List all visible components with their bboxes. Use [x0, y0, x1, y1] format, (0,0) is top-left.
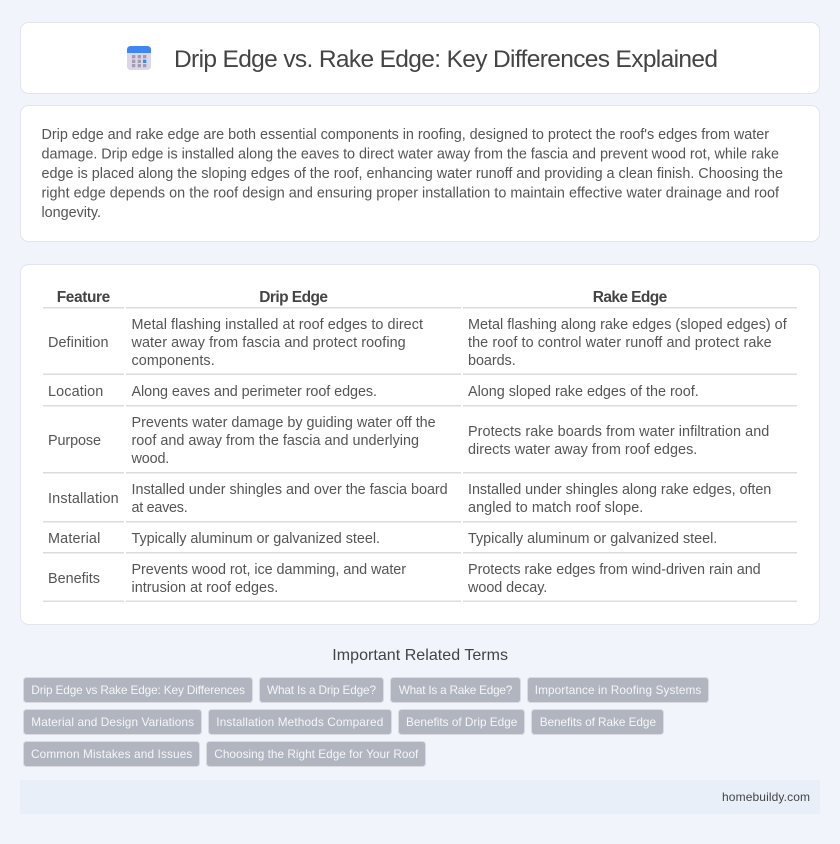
text block: introduction: Drip edge and rake edge are both essential components in roofing, designed to protect the roof's edges from water: [42, 127, 769, 143]
tag: [532, 710, 664, 734]
tag: [206, 742, 426, 766]
table header row: Drip Edge: [259, 289, 328, 306]
table row: location: [43, 384, 797, 406]
heading: important related terms: Important Related Terms: [332, 647, 508, 664]
table row: benefits: [43, 562, 797, 602]
panel: introduction: [20, 106, 820, 242]
footer: homebuildy.com: [722, 790, 810, 804]
table row: definition: Metal flashing along rake edges (sloped edges) of: [468, 317, 788, 333]
tag: [24, 710, 202, 734]
tag: [260, 678, 384, 702]
table row: location: Along eaves and perimeter roof edges.: [132, 384, 377, 400]
table row: benefits: intrusion at roof edges.: [132, 580, 278, 596]
table row: definition: water away from fascia and protect roofing: [130, 335, 406, 351]
tag: What Is a Drip Edge?: [267, 683, 376, 697]
text block: introduction: edge is placed along the sloping edges of the roof, enhancing water runoff and providing a clean finish. Choosing the: [42, 166, 783, 182]
table row: purpose: [43, 415, 797, 474]
table row: purpose: wood.: [130, 451, 169, 467]
table row: purpose: roof and away from the fascia and underlying: [132, 433, 419, 449]
tag: [24, 742, 200, 766]
table row: definition: [43, 317, 797, 375]
table row: installation: Installation: [48, 491, 119, 507]
table row: definition: the roof to control water runoff and protect rake: [468, 335, 772, 351]
table row: location: Location: [48, 384, 103, 400]
tag: Drip Edge vs Rake Edge: Key Differences: [31, 683, 245, 697]
tag: Installation Methods Compared: [216, 715, 383, 729]
table row: purpose: directs water away from roof edges.: [468, 442, 697, 458]
panel: comparison table: [20, 264, 820, 624]
text block: introduction: damage. Drip edge is installed along the eaves to direct water away from the fascia and prevent wood rot, while rake: [42, 146, 779, 162]
table header row: Rake Edge: [593, 289, 668, 306]
table row: installation: Installed under shingles and over the fascia board: [132, 482, 448, 498]
table row: purpose: Prevents water damage by guiding water off the: [132, 415, 436, 431]
tag: Material and Design Variations: [31, 715, 194, 729]
tag: Common Mistakes and Issues: [31, 747, 192, 761]
table row: benefits: Prevents wood rot, ice damming, and water: [132, 562, 406, 578]
tag: [208, 710, 392, 734]
table row: definition: Definition: [48, 335, 108, 351]
tag: [398, 710, 524, 734]
table row: definition: boards.: [468, 353, 516, 369]
table row: material: [43, 531, 797, 554]
footer: [20, 780, 820, 814]
icon: calendar: [127, 46, 151, 70]
panel: header: [20, 22, 820, 94]
related terms tags: [24, 678, 708, 766]
table row: installation: [43, 482, 797, 522]
tag: Benefits of Rake Edge: [540, 715, 656, 729]
table row: material: Typically aluminum or galvanized steel.: [468, 531, 717, 547]
table row: installation: angled to match roof slope.: [468, 500, 643, 516]
table header row: Feature: [57, 289, 111, 306]
tag: What Is a Rake Edge?: [399, 683, 513, 697]
table row: installation: at eaves.: [132, 500, 188, 516]
table row: purpose: Purpose: [48, 433, 101, 449]
table row: purpose: Protects rake boards from water infiltration and: [468, 424, 769, 440]
table row: location: Along sloped rake edges of the roof.: [468, 384, 699, 400]
tag: Benefits of Drip Edge: [406, 715, 518, 729]
text block: introduction: [42, 127, 783, 221]
table row: definition: components.: [132, 353, 215, 369]
table row: benefits: wood decay.: [467, 580, 547, 596]
title: Drip Edge vs. Rake Edge: Key Differences Explained: [174, 46, 718, 73]
table row: definition: Metal flashing installed at roof edges to direct: [132, 317, 423, 333]
text block: introduction: longevity.: [42, 205, 101, 221]
table row: benefits: Protects rake edges from wind-driven rain and: [468, 562, 761, 578]
tag: [390, 678, 520, 702]
tag: [528, 678, 708, 702]
table header row: [43, 289, 797, 308]
tag: [24, 678, 252, 702]
table row: material: Material: [48, 531, 100, 547]
table row: installation: Installed under shingles along rake edges, often: [468, 482, 771, 498]
table row: benefits: Benefits: [48, 571, 100, 587]
tag: Importance in Roofing Systems: [535, 683, 701, 697]
text block: introduction: right edge depends on the roof design and ensuring proper installation to maintain effective water drainage and roof: [42, 186, 780, 202]
table row: material: Typically aluminum or galvanized steel.: [132, 531, 380, 547]
tag: Choosing the Right Edge for Your Roof: [214, 747, 419, 761]
